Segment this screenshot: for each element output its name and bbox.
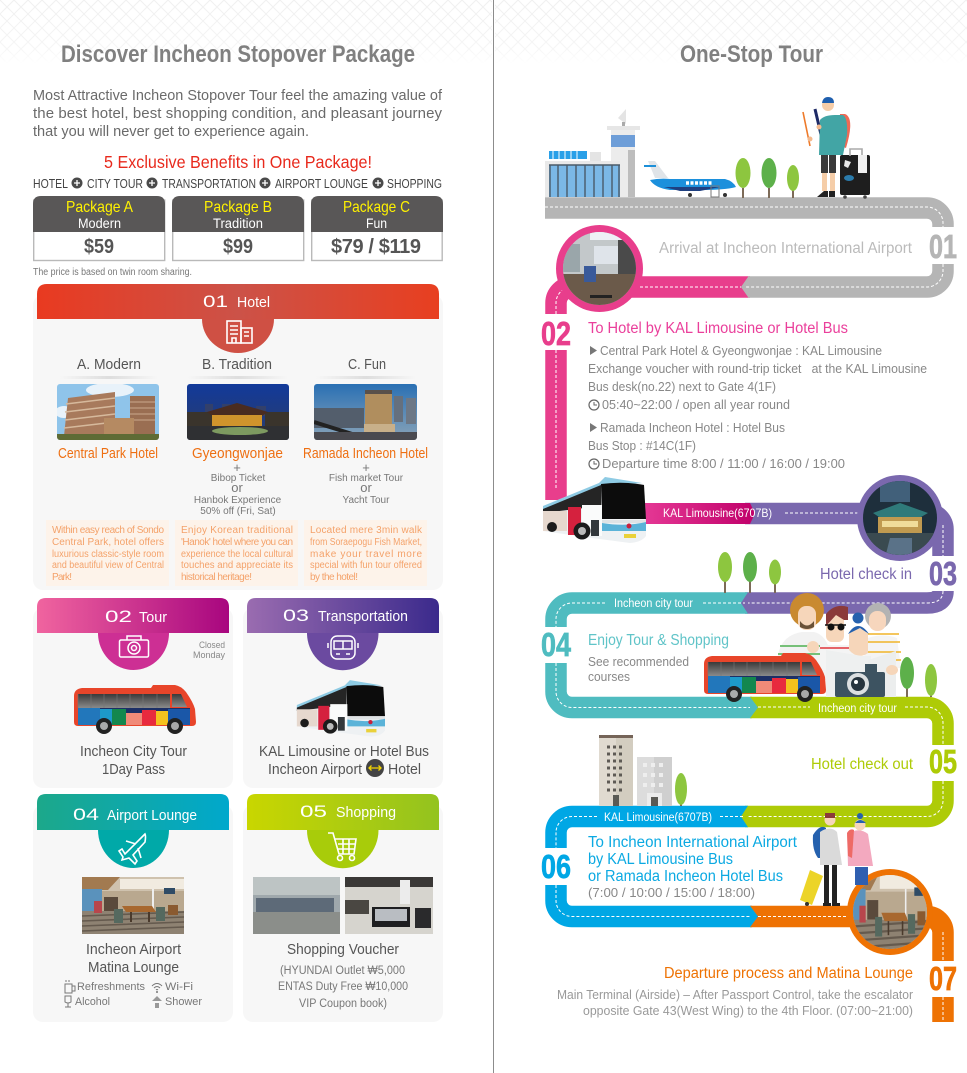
hotel header <box>37 284 439 353</box>
illustration: trees at check in <box>718 552 781 593</box>
price card: package A <box>33 196 165 260</box>
road segment: orange departure <box>750 906 943 1022</box>
description: Ramada <box>304 520 427 586</box>
icon: camera <box>120 636 148 657</box>
step 06 text: by KAL Limousine Bus <box>588 851 733 868</box>
road segment: pink, airport to hotel <box>556 287 750 500</box>
lounge header: 04 <box>73 805 99 824</box>
transportation caption: KAL Limousine or Hotel Bus <box>259 744 429 760</box>
icon: airplane <box>119 834 146 864</box>
price card: package C <box>311 196 443 260</box>
illustration: couple of travelers <box>800 813 873 906</box>
price card: package C: $79 / $119 <box>331 236 421 258</box>
closed note: Monday <box>193 650 225 661</box>
intro paragraph <box>33 87 443 140</box>
benefits list <box>33 177 442 191</box>
package C extras: Fish market Tour <box>329 473 404 484</box>
hotel names: Ramada Incheon Hotel <box>303 445 428 462</box>
step 02 details: 05:40~22:00 / open all year round <box>602 397 790 412</box>
step 06 text: (7:00 / 10:00 / 15:00 / 18:00) <box>588 885 755 900</box>
price card: package A: Modern <box>78 216 121 231</box>
shopping details: (HYUNDAI Outlet ₩5,000 <box>280 965 405 977</box>
step 02 number: 02 <box>541 315 571 352</box>
photo: Gyeongwonjae <box>187 384 289 440</box>
package C extras: or <box>360 480 372 495</box>
step 04 text <box>588 632 729 684</box>
description: Gyeongwonjae: touches and appreciate its <box>181 560 293 571</box>
lounge caption: Matina Lounge <box>88 960 179 976</box>
benefits heading: 5 Exclusive Benefits in One Package! <box>104 152 372 172</box>
left column title: Discover Incheon Stopover Package <box>61 41 415 68</box>
description: Central Park: luxurious classic-style room <box>52 549 164 560</box>
benefits list: HOTEL <box>33 177 68 191</box>
background lattice pattern <box>0 0 967 64</box>
package B extras: 50% off (Fri, Sat) <box>200 506 276 517</box>
description: Central Park: Park! <box>52 572 72 583</box>
illustration: tree by hotel <box>675 773 687 806</box>
illustration: hotel buildings <box>599 735 672 806</box>
photo: lounge <box>82 877 184 934</box>
panel: hotel <box>33 284 443 590</box>
intro paragraph: Most Attractive Incheon Stopover Tour feel the amazing value of <box>33 87 443 104</box>
step 06 text: or Ramada Incheon Hotel Bus <box>588 868 783 885</box>
road segment: teal city tour <box>556 592 752 708</box>
price card: package A: Package A <box>66 199 133 216</box>
photo: Ramada Incheon Hotel <box>314 384 417 440</box>
road label: Incheon city tour, lower: Incheon city tour <box>818 703 897 715</box>
intro paragraph: that you will never get to experience again. <box>33 123 309 140</box>
intro paragraph: the best hotel, best shopping condition, and pleasant journey <box>33 105 442 122</box>
description: Ramada: Located mere 3min walk <box>310 525 423 536</box>
package B extras: + <box>233 460 241 475</box>
tour header: 02 <box>105 607 132 626</box>
step 02 details: Departure time 8:00 / 11:00 / 16:00 / 19:00 <box>602 456 845 471</box>
panel: airport lounge <box>33 794 233 1022</box>
shopping details <box>278 965 408 1010</box>
illustration: trees <box>736 158 799 198</box>
description: Ramada: make your travel more <box>310 549 422 560</box>
package B extras: or <box>231 480 243 495</box>
column headings: A. Modern <box>77 357 141 373</box>
panel: shopping <box>243 794 443 1022</box>
step 07 details: Main Terminal (Airside) – After Passport Control, take the escalator <box>557 987 914 1002</box>
step 07 details <box>557 987 914 1018</box>
step 05 label: 05 <box>929 743 957 780</box>
package C extras: Yacht Tour <box>343 495 390 506</box>
photo: duty free <box>345 877 433 934</box>
illustration: airplane <box>644 161 736 197</box>
description: Gyeongwonjae: historical heritage! <box>181 572 252 583</box>
step 03 label: Hotel check in <box>820 566 912 583</box>
step 04 text: courses <box>588 669 630 684</box>
transportation header <box>247 598 439 670</box>
step 04 text: See recommended <box>588 654 689 669</box>
step 07 details: opposite Gate 43(West Wing) to the 4th Floor. (07:00~21:00) <box>583 1003 913 1018</box>
road label: KAL limousine, blue: KAL Limousine(6707B) <box>604 812 712 824</box>
package C extras <box>329 460 404 506</box>
road segment: gray arrival upper <box>545 207 943 227</box>
icon: cart <box>328 833 356 860</box>
hotel header: 01 <box>203 292 228 311</box>
shopping header: Shopping <box>336 804 396 821</box>
step 02 details: Central Park Hotel & Gyeongwonjae : KAL Limousine <box>600 343 882 358</box>
lounge caption <box>86 942 181 976</box>
column headings <box>60 357 416 379</box>
closed note: Closed <box>199 640 225 651</box>
road segment: lime check out <box>745 697 943 816</box>
shopping header <box>247 794 439 868</box>
photo circle: hotel at night <box>857 475 943 561</box>
lounge amenities: Shower <box>165 996 202 1008</box>
step 04 text: Enjoy Tour & Shopping <box>588 632 729 649</box>
icon: bus <box>328 636 358 659</box>
step 02 details <box>588 343 927 471</box>
price note: The price is based on twin room sharing. <box>33 267 192 278</box>
photo circle: lounge <box>847 869 933 955</box>
step 02 heading: To Hotel by KAL Limousine or Hotel Bus <box>588 320 848 337</box>
hotel names: Central Park Hotel <box>58 445 158 462</box>
illustration: airport terminal and tower <box>545 109 640 197</box>
panel: tour <box>33 598 233 788</box>
shopping header: 05 <box>300 802 327 821</box>
step 07 heading: Departure process and Matina Lounge <box>664 965 913 982</box>
step 01 label: 01 <box>929 228 957 265</box>
illustration: traveler with luggage <box>803 97 870 199</box>
shopping caption: Shopping Voucher <box>287 942 399 958</box>
photo circle: limousine desk <box>556 225 643 312</box>
column headings: C. Fun <box>348 357 386 373</box>
step 02 details: Exchange voucher with round-trip ticket at the KAL Limousine <box>588 361 927 376</box>
step 06 text: To Incheon International Airport <box>588 834 798 851</box>
transportation header: 03 <box>283 606 309 625</box>
package B extras <box>194 460 282 517</box>
lounge header <box>37 794 229 868</box>
price card: package B: $99 <box>223 236 253 258</box>
lounge header: Airport Lounge <box>107 807 197 824</box>
price card: package A: $59 <box>84 236 114 258</box>
photo: Central Park Hotel <box>55 383 159 440</box>
package C extras: + <box>362 460 370 475</box>
road label: Incheon city tour: Incheon city tour <box>614 598 693 610</box>
column headings: B. Tradition <box>202 357 272 373</box>
center divider <box>493 0 494 1073</box>
tour caption <box>80 744 187 778</box>
step 07 number: 07 <box>929 960 957 997</box>
lounge amenities: Alcohol <box>75 996 110 1008</box>
benefits list: TRANSPORTATION <box>162 177 256 191</box>
description: Central Park: and beautiful view of Central <box>52 560 164 571</box>
description: Ramada: by the hotel! <box>310 572 358 583</box>
step 06 number: 06 <box>541 848 571 885</box>
lounge amenities: Refreshments <box>77 981 145 993</box>
step 01 label: Arrival at Incheon International Airport <box>659 240 913 257</box>
step 03 label: 03 <box>929 555 957 592</box>
closed note <box>193 640 225 661</box>
tour caption: Incheon City Tour <box>80 744 187 760</box>
step 01 label <box>659 228 957 265</box>
transportation caption: Incheon Airport <box>268 762 362 778</box>
transportation caption: Hotel <box>388 762 421 778</box>
hotel header: Hotel <box>237 294 270 311</box>
road label: KAL limousine: KAL Limousine(6707B) <box>663 506 772 520</box>
benefits list: SHOPPING <box>387 177 442 191</box>
road segment: purple, to hotel check in <box>745 513 943 603</box>
icon: buildings <box>227 321 252 343</box>
panel: transportation <box>243 598 443 788</box>
description: Central Park: Within easy reach of Sondo <box>52 525 164 536</box>
package B extras: Bibop Ticket <box>211 473 265 484</box>
price card: package B: Package B <box>204 199 272 216</box>
transportation header: Transportation <box>318 608 408 625</box>
road segment: blue to airport <box>556 806 752 916</box>
illustration: trees by family <box>900 657 937 697</box>
hotel names: Gyeongwonjae <box>192 445 283 462</box>
step 06 text <box>588 834 798 900</box>
lounge caption: Incheon Airport <box>86 942 181 958</box>
image: tour bus on road <box>704 653 826 702</box>
description: Ramada: from Soraepogu Fish Market, <box>310 537 422 548</box>
description: Gyeongwonjae: 'Hanok' hotel where you can <box>181 537 293 548</box>
price card: package B <box>172 196 304 260</box>
lounge amenities: Wi-Fi <box>165 981 193 993</box>
tour caption: 1Day Pass <box>102 762 165 778</box>
step 02 details: Bus desk(no.22) next to Gate 4(1F) <box>588 379 776 394</box>
tour header: Tour <box>139 609 167 626</box>
illustration: family with map and camera <box>778 593 901 697</box>
shopping details: VIP Coupon book) <box>299 998 387 1010</box>
right column title: One-Stop Tour <box>680 41 823 68</box>
transportation caption <box>259 744 429 778</box>
step 02 details: Bus Stop : #14C(1F) <box>588 438 696 453</box>
price card: package B: Tradition <box>213 216 263 231</box>
description: Gyeongwonjae <box>175 520 298 586</box>
description: Central Park: Central Park, hotel offers <box>52 537 164 548</box>
description: Gyeongwonjae: Enjoy Korean traditional <box>181 525 293 536</box>
road segment: magenta limousine <box>640 503 755 524</box>
step 03 label <box>820 555 957 592</box>
step 05 label <box>811 743 957 780</box>
image: city tour bus <box>74 685 196 734</box>
description: Ramada: special with fun tour offered <box>310 560 422 571</box>
lounge amenities <box>65 980 202 1008</box>
description: Gyeongwonjae: experience the local cultural <box>181 549 293 560</box>
step 02 details: Ramada Incheon Hotel : Hotel Bus <box>600 420 785 435</box>
hotel names <box>58 445 428 462</box>
road segment: gray arrival lower <box>741 264 943 298</box>
package B extras: Hanbok Experience <box>194 495 282 506</box>
benefits list: CITY TOUR <box>87 177 143 191</box>
photo: outlet <box>253 877 340 934</box>
step 04 number: 04 <box>541 626 572 663</box>
description: Central Park <box>46 520 169 586</box>
shopping details: ENTAS Duty Free ₩10,000 <box>278 981 408 993</box>
image: limousine on road <box>543 477 646 543</box>
benefits list: AIRPORT LOUNGE <box>275 177 368 191</box>
tour header <box>37 598 229 670</box>
price card: package C: Fun <box>366 216 387 231</box>
image: KAL limousine <box>297 680 385 737</box>
price card: package C: Package C <box>343 199 410 216</box>
step 05 label: Hotel check out <box>811 756 914 773</box>
